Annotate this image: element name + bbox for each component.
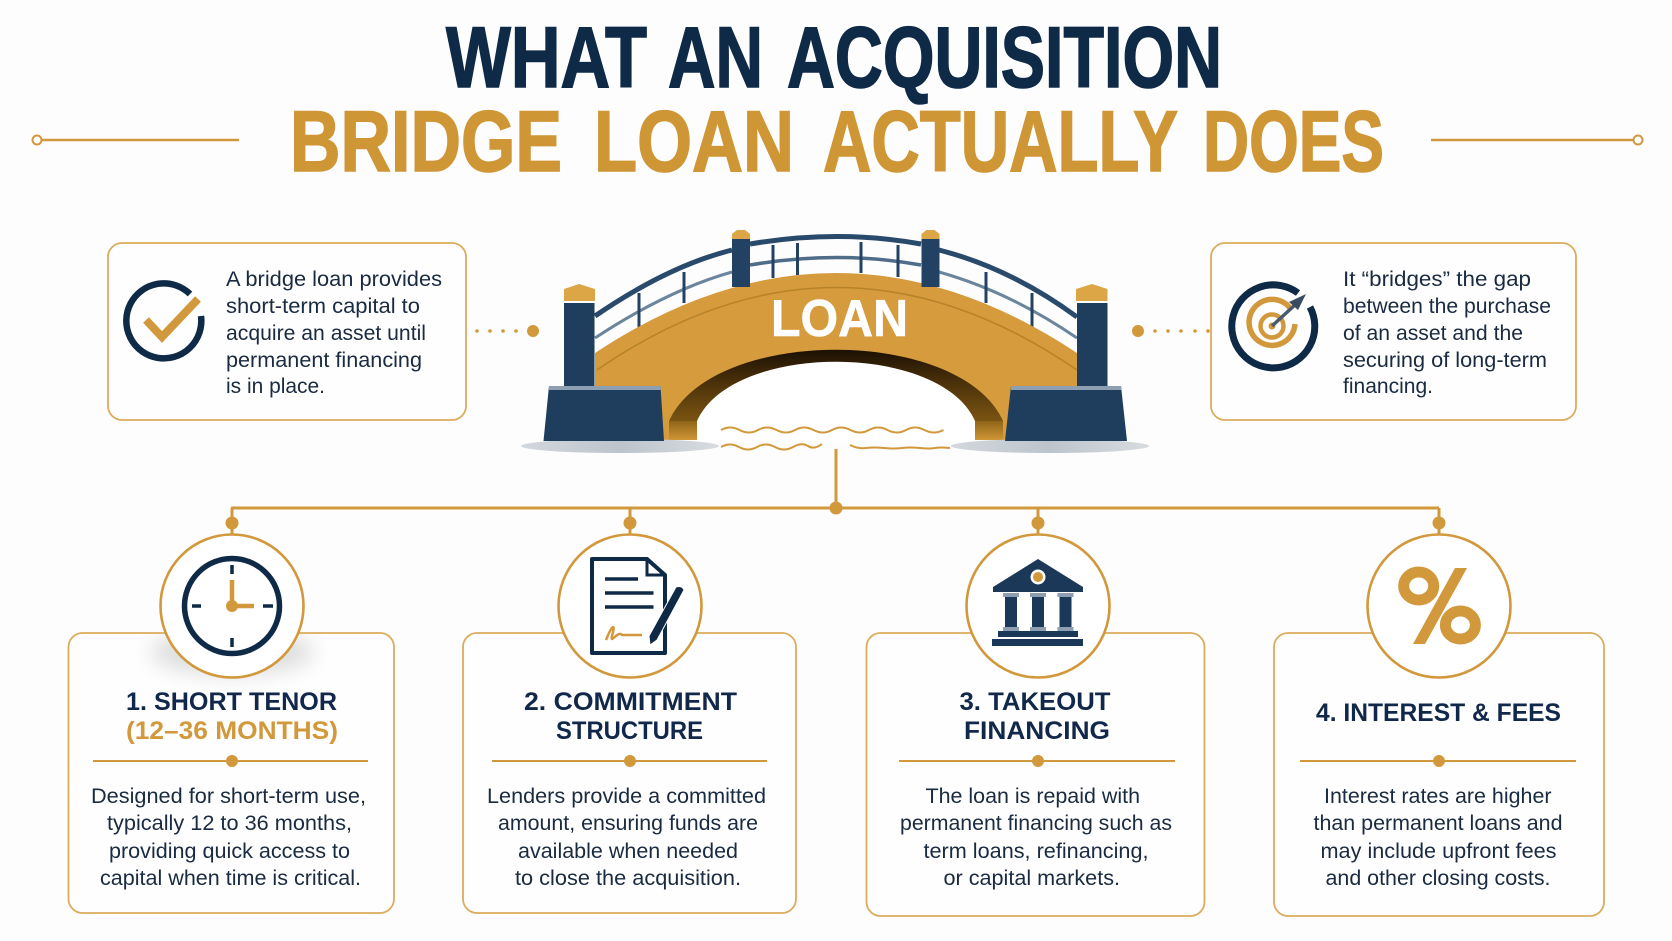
title line 2: ACTUALLY: [823, 94, 1178, 190]
card body: The loan is repaid with: [926, 785, 1140, 808]
card body: Designed for short-term use,: [91, 785, 366, 808]
pier bases: [544, 386, 1127, 441]
card body: may include upfront fees: [1320, 840, 1556, 863]
card divider: [492, 755, 767, 767]
icon: bank: [966, 534, 1110, 678]
card divider: [899, 755, 1175, 767]
title line 2: BRIDGE: [290, 94, 562, 190]
title line 2: [290, 94, 1384, 190]
panel: takeout financing: [866, 534, 1204, 916]
text: definition: is in place.: [226, 375, 325, 398]
connector tree: [226, 449, 1446, 534]
card body: to close the acquisition.: [515, 867, 741, 890]
card heading: 3. TAKEOUT: [960, 688, 1110, 716]
card heading: STRUCTURE: [556, 717, 703, 745]
text: bridges the gap: It “bridges” the gap: [1343, 268, 1531, 291]
ground shadows: [521, 439, 1149, 453]
arch moulding line: [597, 288, 1077, 370]
text: bridges the gap: of an asset and the: [1343, 322, 1523, 345]
title line 2: LOAN: [594, 94, 794, 190]
card body: [900, 785, 1172, 890]
card heading: [960, 688, 1110, 745]
card body: permanent financing such as: [900, 812, 1172, 835]
circle shadow: [150, 628, 314, 676]
text: bridges the gap: between the purchase: [1343, 295, 1551, 318]
text: definition: A bridge loan provides: [226, 268, 442, 291]
text: bridges the gap: [1343, 268, 1551, 398]
card heading: 2. COMMITMENT: [524, 688, 737, 716]
arch feet: [669, 421, 1003, 440]
card body: term loans, refinancing,: [924, 840, 1148, 863]
handrails: [595, 236, 1077, 338]
connector: left panel to bridge: [475, 325, 539, 337]
icon: clock: [160, 534, 304, 678]
card heading: [126, 688, 338, 745]
card divider: [93, 755, 368, 767]
card divider: [1300, 755, 1576, 767]
title ornament: right: [1431, 136, 1642, 144]
card body: and other closing costs.: [1326, 867, 1550, 890]
icon: percent: [1368, 534, 1510, 678]
card heading: 4. INTEREST & FEES: [1316, 699, 1561, 727]
water waves: [721, 428, 950, 450]
panel: interest and fees: [1274, 534, 1604, 916]
title: [290, 10, 1384, 190]
illustration: loan bridge: [521, 230, 1149, 453]
panel: commitment structure: [463, 534, 796, 913]
card body: capital when time is critical.: [100, 867, 361, 890]
card heading: FINANCING: [964, 717, 1110, 745]
text: bridges the gap: securing of long-term: [1343, 349, 1547, 372]
bridge label: LOAN: [771, 290, 908, 348]
title ornament: left: [32, 136, 239, 144]
title line 1: ACQUISITION: [787, 10, 1222, 106]
card body: or capital markets.: [944, 867, 1120, 890]
card body: typically 12 to 36 months,: [107, 812, 352, 835]
panel: left definition: [108, 243, 466, 420]
text: bridges the gap: financing.: [1343, 375, 1433, 398]
icon: document and pen: [558, 534, 702, 678]
arch opening: [697, 362, 975, 441]
text: definition: short-term capital to: [226, 295, 420, 318]
text: definition: [226, 268, 442, 398]
card body: Lenders provide a committed: [487, 785, 766, 808]
title line 2: DOES: [1203, 94, 1384, 190]
arch underside shadow: [669, 350, 1003, 421]
card heading: 1. SHORT TENOR: [126, 688, 337, 716]
card heading: [524, 688, 737, 745]
card body: than permanent loans and: [1314, 812, 1562, 835]
arch deck: [595, 273, 1077, 440]
icon: target with arrow: [1232, 285, 1315, 368]
card body: [1314, 785, 1562, 890]
inner posts: [732, 230, 940, 287]
connector: right panel to bridge: [1132, 325, 1210, 337]
card body: Interest rates are higher: [1324, 785, 1552, 808]
text: definition: acquire an asset until: [226, 322, 426, 345]
card body: [91, 785, 366, 890]
title line 1: AN: [668, 10, 763, 106]
title line 1: WHAT: [446, 10, 647, 106]
title line 1: [446, 10, 1222, 106]
card body: [487, 785, 766, 890]
text: definition: permanent financing: [226, 349, 422, 372]
card body: providing quick access to: [109, 840, 350, 863]
outer posts: [564, 284, 1108, 387]
panel: short tenor: [68, 534, 394, 913]
card heading: (12–36 MONTHS): [126, 717, 338, 745]
card body: available when needed: [518, 840, 738, 863]
panel: right definition: [1211, 243, 1576, 420]
card body: amount, ensuring funds are: [498, 812, 758, 835]
icon: check mark in ring: [126, 283, 201, 358]
